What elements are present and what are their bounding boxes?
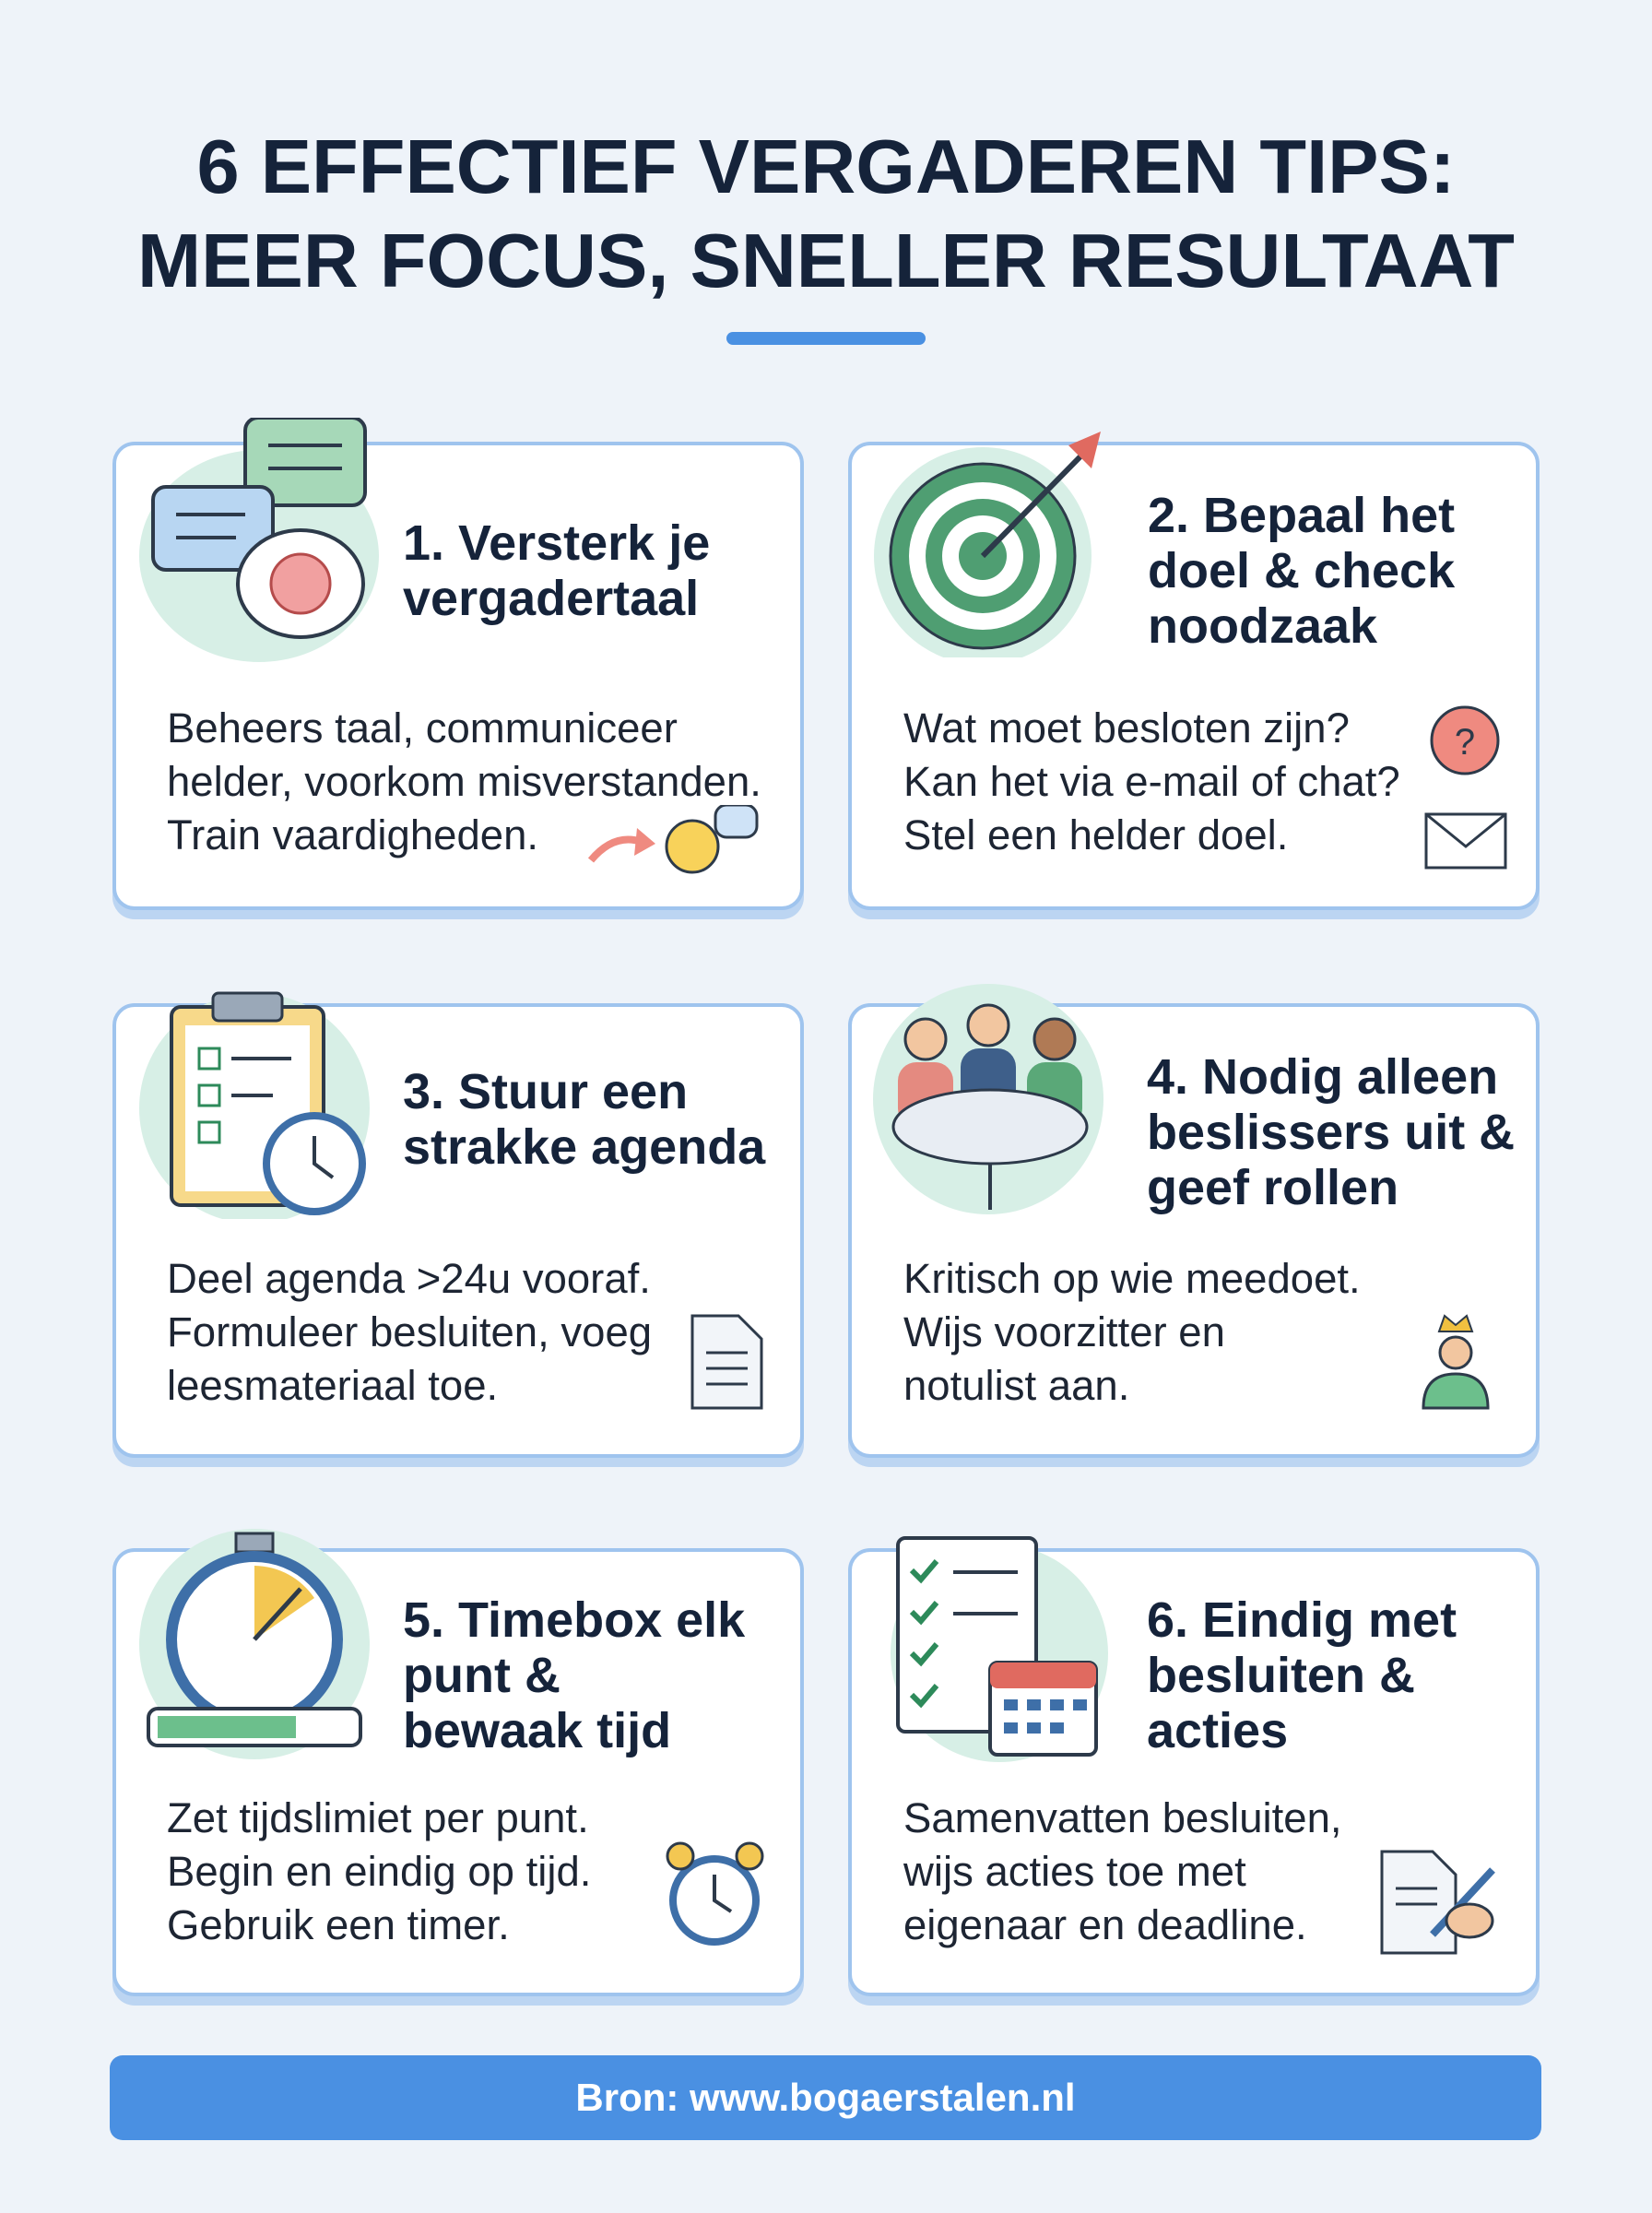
heading: 5. Timebox elk <box>403 1592 745 1648</box>
text <box>903 704 1400 858</box>
text <box>167 1794 591 1948</box>
text: Samenvatten besluiten, <box>903 1794 1342 1841</box>
icon: clipboard with clock <box>139 992 370 1219</box>
heading: bewaak tijd <box>403 1703 671 1758</box>
heading <box>403 1064 765 1175</box>
icon: signing document <box>1381 1850 1495 1955</box>
heading: 3. Stuur een <box>403 1064 688 1119</box>
text: Beheers taal, communiceer <box>167 704 678 751</box>
heading: noodzaak <box>1148 598 1377 654</box>
heading: strakke agenda <box>403 1119 765 1175</box>
panel: tip 3 <box>112 1003 804 1458</box>
heading <box>1148 488 1455 654</box>
icon: people at table <box>873 984 1103 1214</box>
heading <box>403 1592 745 1758</box>
icon: document <box>691 1315 763 1409</box>
text: Kritisch op wie meedoet. <box>903 1255 1361 1302</box>
icon: chairperson with crown <box>1422 1314 1490 1409</box>
text: Gebruik een timer. <box>167 1901 510 1948</box>
heading <box>1147 1049 1515 1215</box>
text: Begin en eindig op tijd. <box>167 1848 591 1895</box>
icon: stopwatch with progress bar <box>139 1529 370 1759</box>
heading <box>403 515 710 626</box>
text: Wijs voorzitter en <box>903 1308 1225 1355</box>
icon: checklist and calendar <box>891 1536 1108 1762</box>
heading: 1. Versterk je <box>403 515 710 571</box>
panel: tip 2 <box>848 442 1540 910</box>
text: Stel een helder doel. <box>903 811 1288 858</box>
icon: target <box>874 432 1101 657</box>
text: helder, voorkom misverstanden. <box>167 758 761 805</box>
icon: question and envelope <box>1425 706 1506 869</box>
text <box>167 704 761 858</box>
panel: tip 1 <box>112 442 804 910</box>
icon: speech bubbles with brain <box>139 418 379 662</box>
text: Deel agenda >24u vooraf. <box>167 1255 651 1302</box>
heading: 6. Eindig met <box>1147 1592 1457 1648</box>
footer: source <box>110 2055 1541 2140</box>
icon: alarm clock <box>666 1842 763 1946</box>
text <box>903 1255 1361 1409</box>
title: MEER FOCUS, SNELLER RESULTAAT <box>137 218 1515 303</box>
icon: question and envelope: ? <box>1455 722 1475 763</box>
heading: acties <box>1147 1703 1288 1758</box>
text: wijs acties toe met <box>903 1848 1246 1895</box>
title <box>137 124 1515 303</box>
heading: vergadertaal <box>403 571 699 626</box>
heading: geef rollen <box>1147 1160 1398 1215</box>
heading: beslissers uit & <box>1147 1105 1515 1160</box>
heading: 4. Nodig alleen <box>1147 1049 1498 1105</box>
panel: tip 5 <box>112 1548 804 1996</box>
heading <box>1147 1592 1457 1758</box>
heading: besluiten & <box>1147 1648 1415 1703</box>
text: Kan het via e-mail of chat? <box>903 758 1400 805</box>
text: Formuleer besluiten, voeg <box>167 1308 652 1355</box>
heading: punt & <box>403 1648 560 1703</box>
heading: doel & check <box>1148 543 1455 598</box>
text: Train vaardigheden. <box>167 811 538 858</box>
title underline <box>726 332 926 345</box>
panel: tip 4 <box>848 1003 1540 1458</box>
heading: 2. Bepaal het <box>1148 488 1455 543</box>
title: 6 EFFECTIEF VERGADEREN TIPS: <box>196 124 1456 209</box>
text: eigenaar en deadline. <box>903 1901 1307 1948</box>
text: Wat moet besloten zijn? <box>903 704 1350 751</box>
panel: tip 6 <box>848 1548 1540 1996</box>
text: leesmateriaal toe. <box>167 1362 498 1409</box>
text <box>903 1794 1342 1948</box>
footer: source: Bron: www.bogaerstalen.nl <box>575 2076 1076 2119</box>
text: Zet tijdslimiet per punt. <box>167 1794 589 1841</box>
text: notulist aan. <box>903 1362 1129 1409</box>
icon: arrow and smiley <box>588 805 758 874</box>
text <box>167 1255 652 1409</box>
